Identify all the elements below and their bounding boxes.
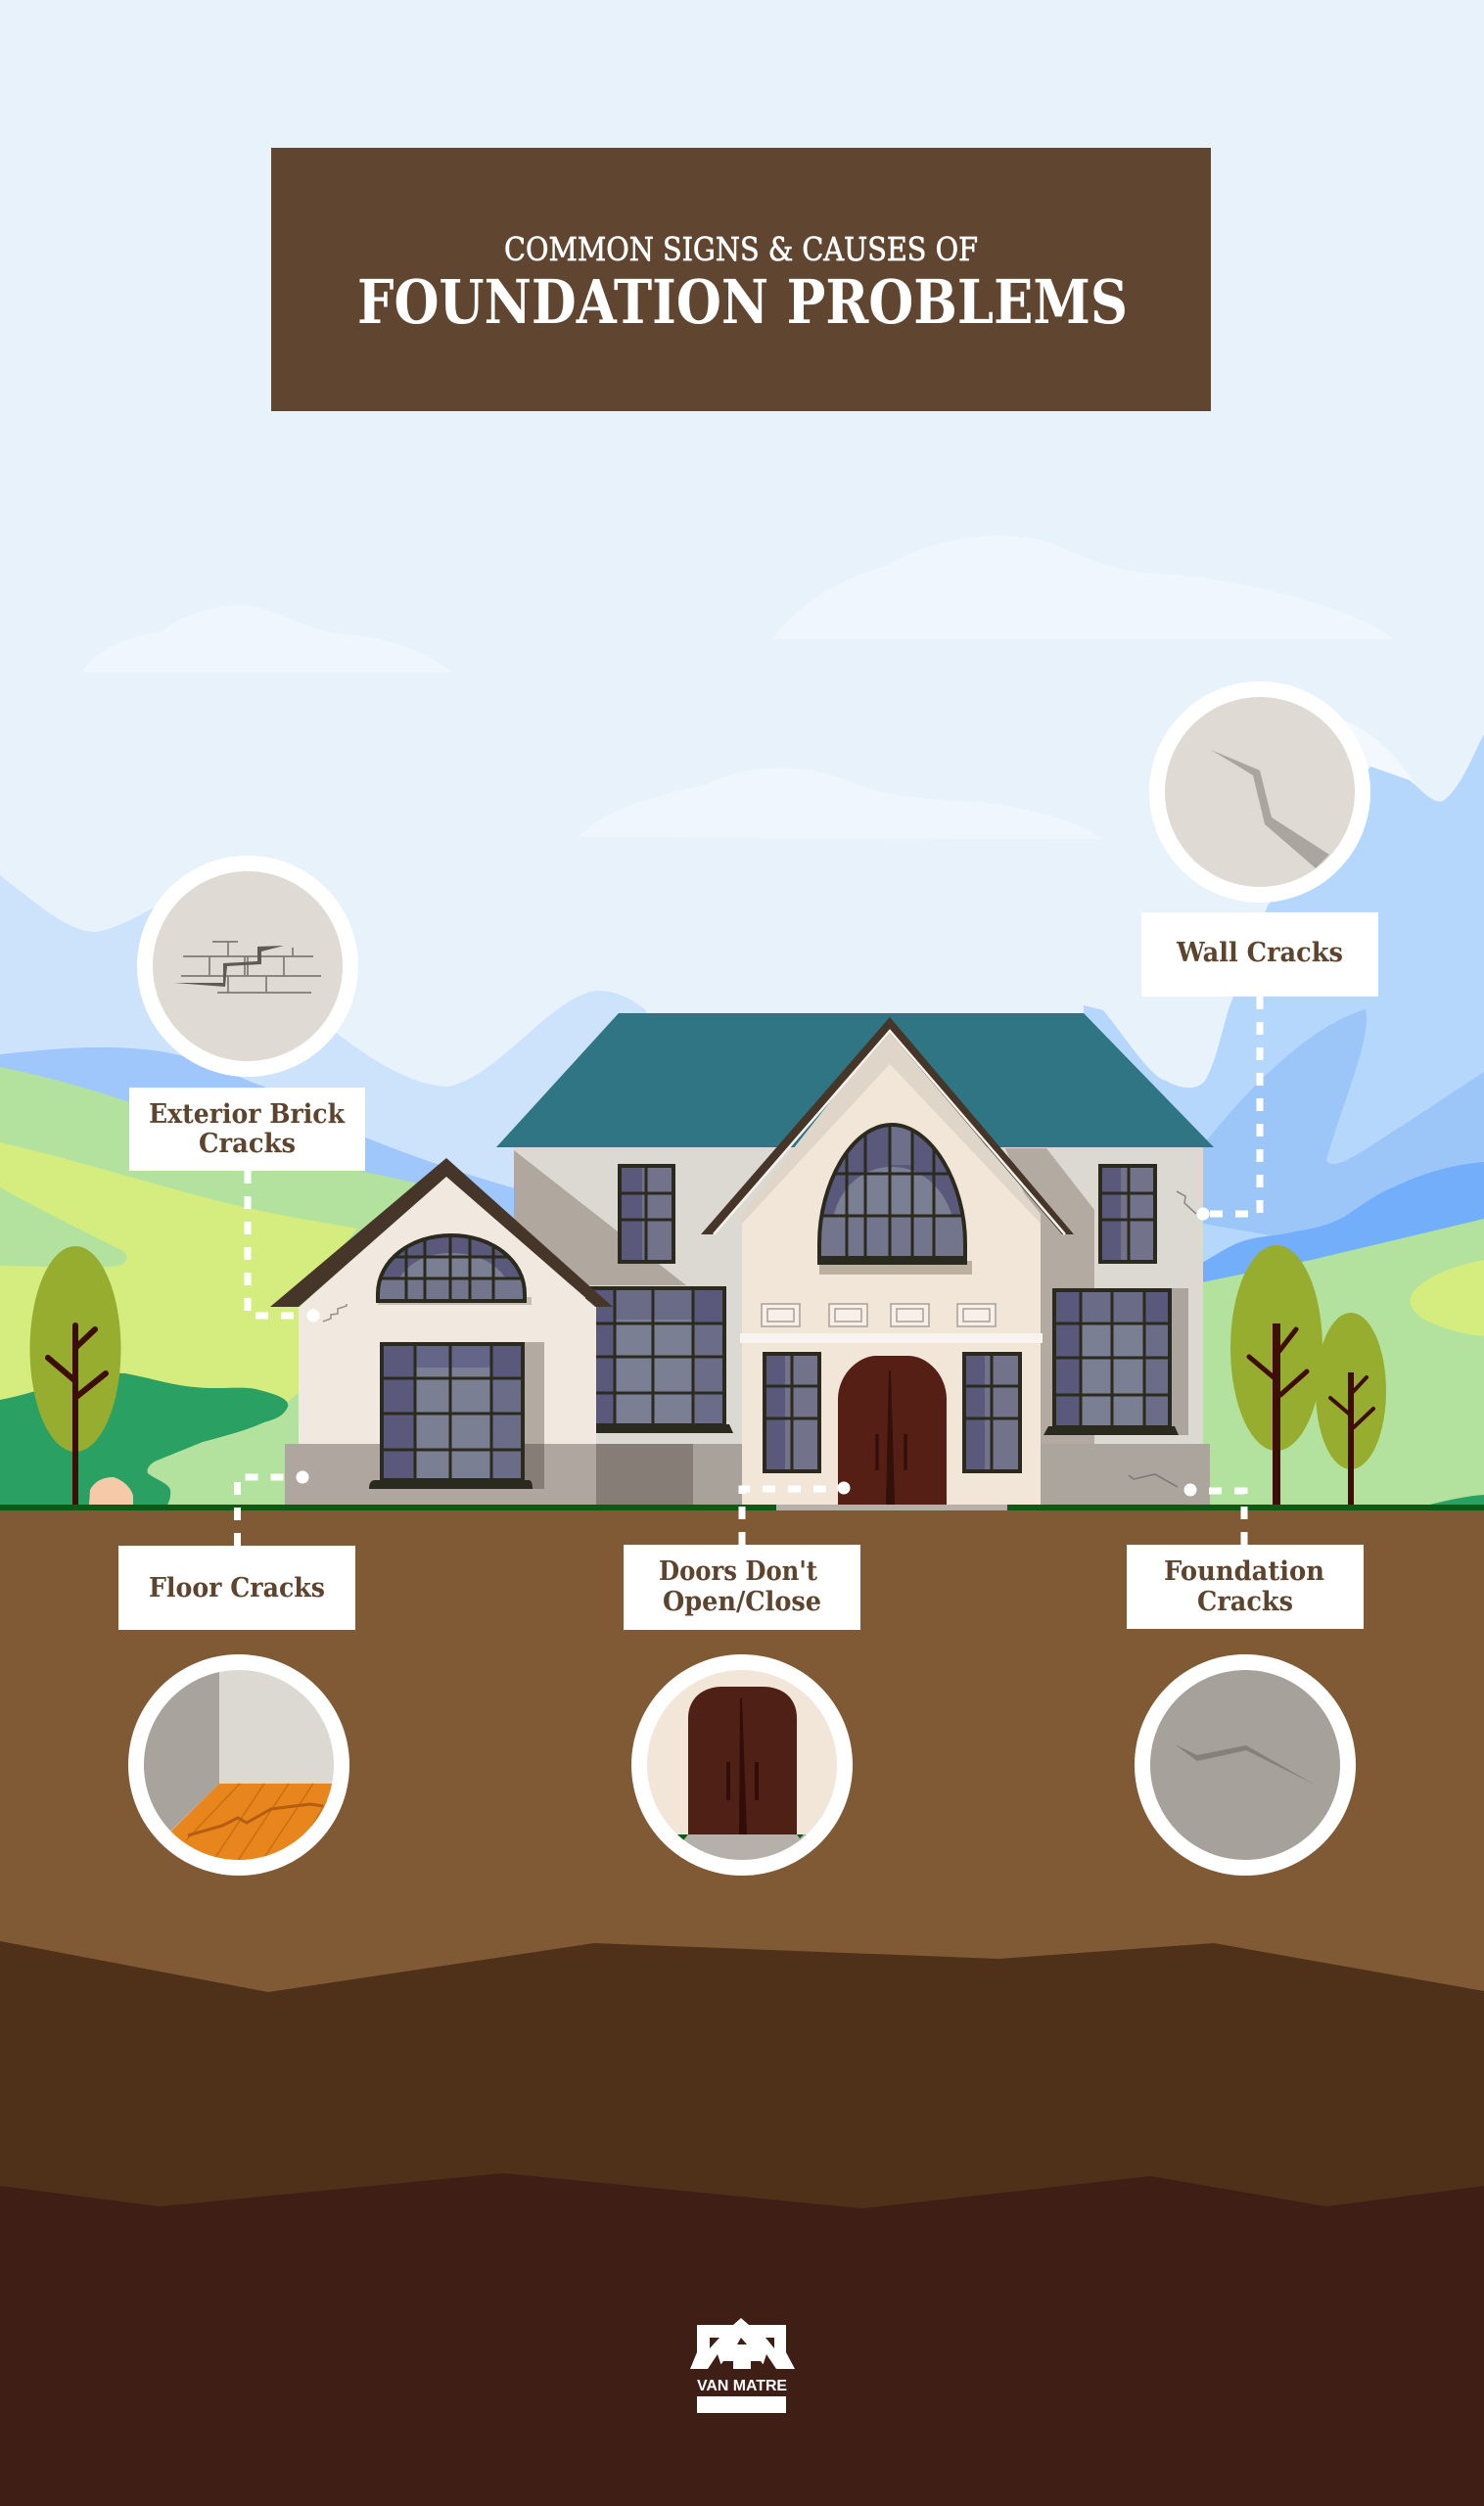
title line 2: FOUNDATION PROBLEMS — [357, 266, 1128, 338]
title panel — [271, 148, 1211, 411]
small house plinth — [285, 1444, 596, 1505]
window: upper right — [1100, 1166, 1155, 1262]
small house arched window shadow — [378, 1297, 532, 1305]
connector: exterior brick cracks — [248, 1171, 319, 1322]
gable front block — [742, 1026, 1041, 1505]
green field, right — [1202, 1219, 1484, 1508]
window: lower right big — [1043, 1288, 1188, 1435]
soil: bottom layer — [0, 2173, 1484, 2506]
blue band, left — [0, 1047, 519, 1273]
small house big window — [369, 1344, 533, 1489]
pale peak behind wall crack circle — [1341, 719, 1414, 783]
logo mark — [690, 2318, 795, 2369]
icon: foundation crack — [1135, 1654, 1356, 1876]
front step — [776, 1505, 1007, 1511]
label — [118, 1546, 355, 1630]
logo name: VAN MATRE — [697, 2378, 787, 2394]
mid blue mountain, right — [1203, 1009, 1484, 1273]
tree: right large — [1230, 1245, 1322, 1505]
sky background — [0, 0, 1484, 1527]
shadow on wall: right — [1005, 1148, 1094, 1444]
callout: floor cracks — [118, 1546, 355, 1876]
connector: wall cracks — [1196, 997, 1260, 1220]
dark blue band, right — [1202, 1162, 1484, 1292]
label: Open/Close — [663, 1587, 821, 1617]
connector: doors — [742, 1482, 850, 1545]
logo bar — [697, 2396, 786, 2413]
icon: door — [631, 1654, 853, 1876]
ground strip — [0, 1505, 1484, 1511]
green field, left — [0, 1067, 519, 1508]
distant mountains, left — [0, 875, 685, 1273]
dark green hill, right corner — [1426, 1495, 1484, 1506]
door-side window: left — [765, 1354, 819, 1471]
gable roof outline — [701, 1017, 1074, 1234]
window: upper left — [620, 1166, 673, 1262]
label: Foundation — [1164, 1556, 1324, 1587]
label: Floor Cracks — [149, 1573, 325, 1603]
label: Cracks — [199, 1129, 296, 1159]
label — [624, 1545, 860, 1630]
cornice — [740, 1333, 1043, 1343]
gable white trim — [714, 1031, 1065, 1234]
distant mountains, right — [1077, 734, 1484, 1292]
small house roof — [270, 1158, 613, 1307]
label: Doors Don't — [659, 1556, 817, 1587]
dark green hill — [0, 1373, 288, 1508]
shadow on wall: left — [514, 1150, 686, 1285]
plinth: left light — [693, 1444, 742, 1505]
icon: brick crack — [137, 856, 358, 1077]
small house arched window — [378, 1235, 525, 1301]
connector: floor cracks — [237, 1470, 309, 1546]
title line 1: COMMON SIGNS & CAUSES OF — [504, 230, 978, 268]
tree: right small — [1316, 1313, 1386, 1505]
rock — [89, 1477, 133, 1505]
tree: left — [29, 1246, 121, 1505]
clouds — [83, 535, 1395, 839]
yellow patch, right — [1411, 1260, 1484, 1336]
plinth: left dark — [595, 1444, 693, 1505]
label — [129, 1088, 365, 1171]
callout: doors don't open/close — [624, 1545, 860, 1876]
arched window — [819, 1125, 966, 1263]
connector: foundation cracks — [1184, 1484, 1244, 1545]
roof — [496, 1013, 1214, 1147]
label — [1127, 1545, 1364, 1629]
callout: wall cracks — [1141, 681, 1378, 997]
door-side window: right — [964, 1354, 1020, 1471]
plinth: right — [1041, 1444, 1210, 1505]
soil: upper layer — [0, 1510, 1484, 2000]
callout: foundation cracks — [1127, 1545, 1364, 1876]
window: lower left big — [587, 1288, 733, 1433]
gable light inner — [742, 1064, 1041, 1505]
callout: exterior brick cracks — [129, 856, 365, 1171]
label: Exterior Brick — [149, 1099, 346, 1130]
small house wall — [299, 1307, 596, 1505]
main wall — [514, 1147, 1203, 1505]
small house big window shadow — [525, 1342, 544, 1489]
icon: wall crack — [1149, 681, 1370, 903]
soil: middle layer — [0, 1941, 1484, 2251]
label: Cracks — [1197, 1587, 1293, 1617]
logo: Van Matre — [690, 2318, 795, 2413]
yellow field, left — [0, 1142, 357, 1459]
front door — [838, 1356, 947, 1505]
connector cracks on house — [323, 1191, 1196, 1487]
decorative panels — [762, 1304, 996, 1326]
arched window shadow — [819, 1261, 972, 1275]
label: Wall Cracks — [1176, 938, 1343, 968]
icon: floor crack — [128, 1654, 349, 1876]
label — [1141, 912, 1378, 997]
house — [270, 1013, 1214, 1505]
